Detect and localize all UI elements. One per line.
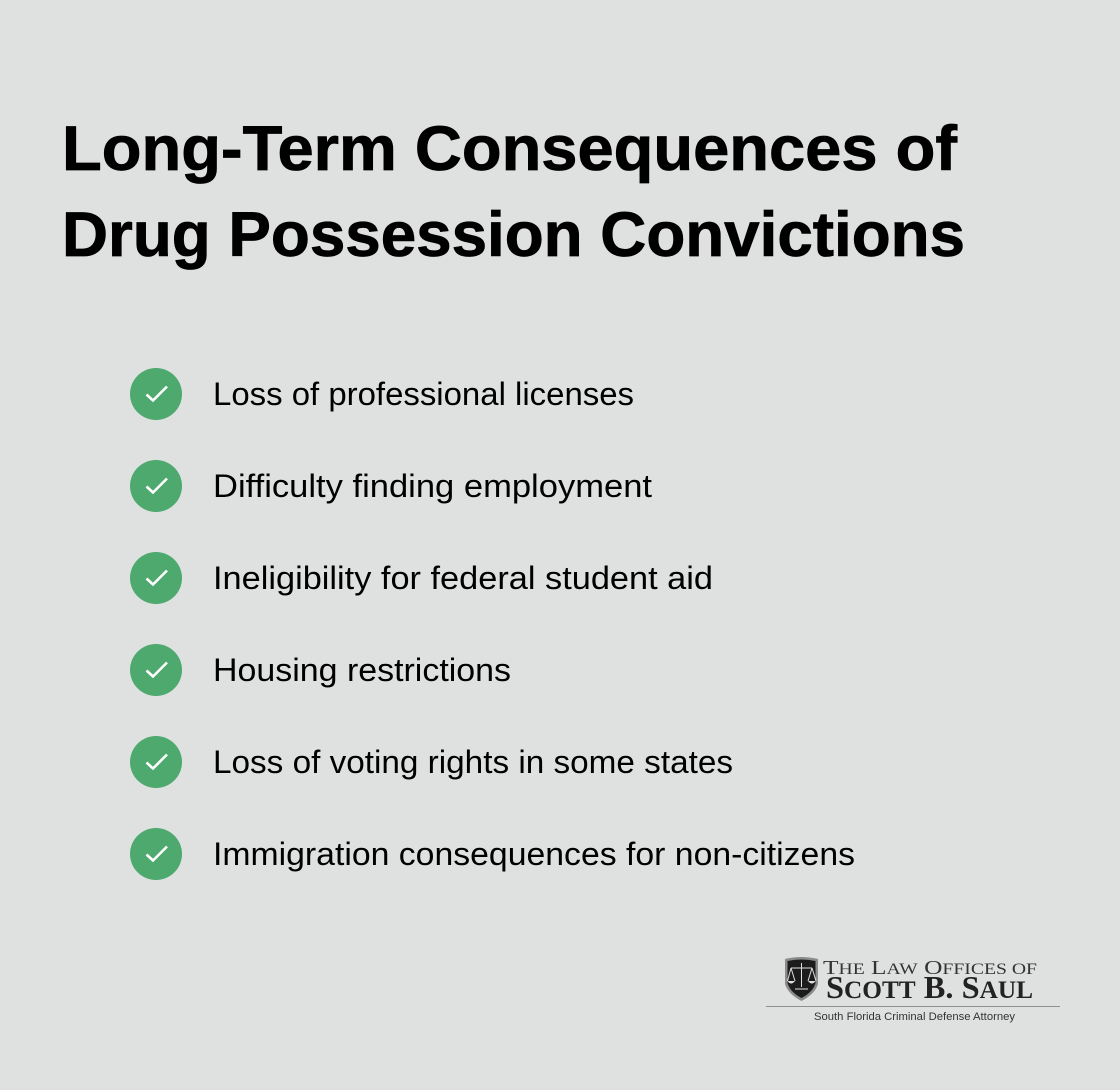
item: immigration	[130, 828, 855, 880]
item: student aid: Ineligibility for federal student aid	[213, 560, 713, 596]
item: employment: Difficulty finding employment	[213, 468, 652, 504]
title: Drug Possession Convictions	[62, 200, 965, 270]
logo name: THE L AW O FFICES OF	[823, 957, 1037, 979]
item: voting rights: Loss of voting rights in some states	[213, 744, 733, 780]
item: housing: Housing restrictions	[213, 652, 511, 688]
icon: shield with scales	[785, 957, 818, 1001]
item: professional licenses	[130, 368, 634, 420]
item: housing	[130, 644, 511, 696]
item: student aid	[130, 552, 713, 604]
logo tagline: South Florida Criminal Defense Attorney	[814, 1011, 1016, 1023]
checklist	[130, 368, 855, 880]
item: employment	[130, 460, 652, 512]
logo	[766, 957, 1060, 1023]
title	[62, 114, 965, 270]
logo: SCOTT B. SAUL	[826, 969, 1033, 1005]
title: Long-Term Consequences of	[62, 114, 958, 184]
item: immigration: Immigration consequences for non-citizens	[213, 836, 855, 872]
logo divider	[766, 1006, 1060, 1007]
item: professional licenses: Loss of professional licenses	[213, 376, 634, 412]
item: voting rights	[130, 736, 733, 788]
